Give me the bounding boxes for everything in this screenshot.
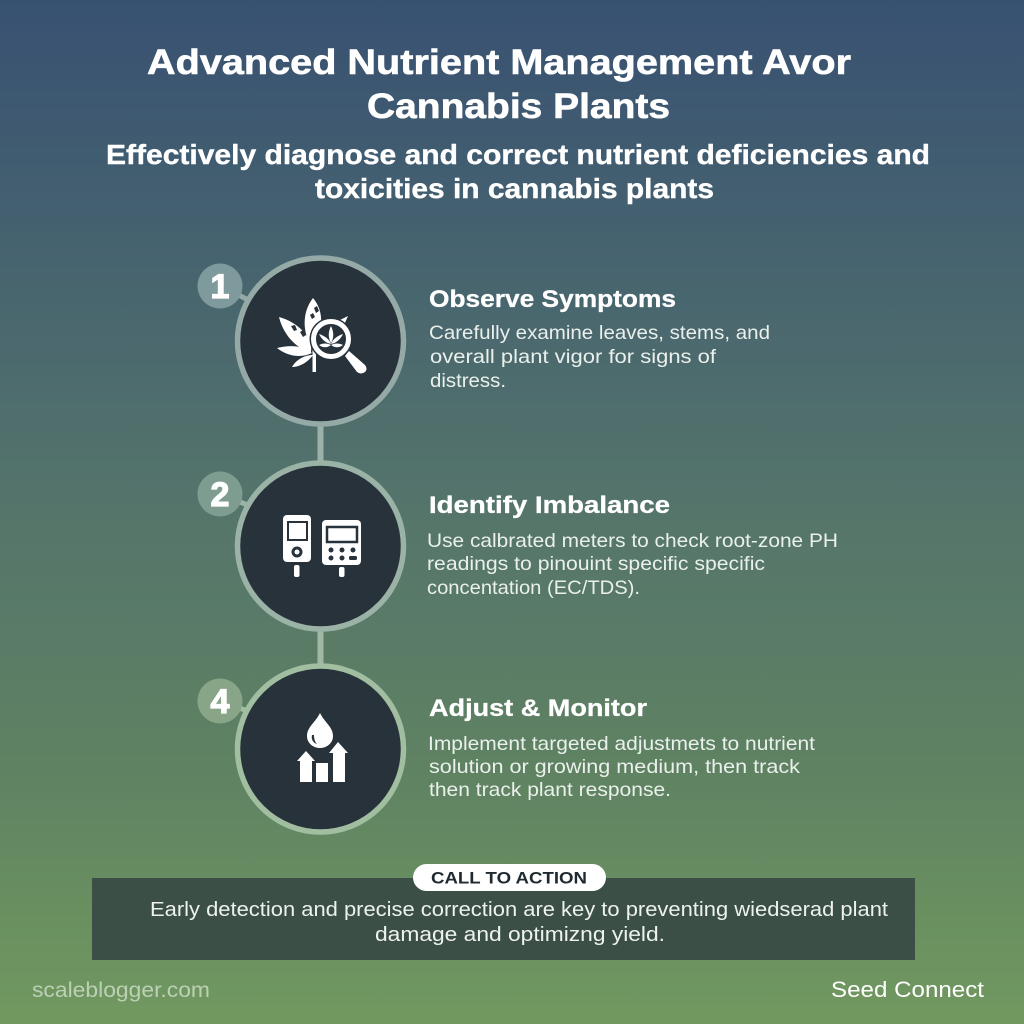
connector: step 1 to step 2 [318,425,324,462]
connector: step 2 to step 3 [318,630,324,665]
step 1 text: Observe Symptoms [429,286,676,313]
step 3 text: solution or growing medium, then track [429,756,800,778]
call to action text [150,898,888,946]
icon: water drop and rising arrows [297,713,348,782]
step 1 node [198,258,404,424]
title: Cannabis Plants [367,87,670,126]
step 3 node [198,666,404,832]
icon: cannabis leaf under magnifier [277,298,366,374]
title [147,43,851,126]
badge 2 [198,472,242,516]
call to action pill [413,864,606,891]
step 3 text: Adjust & Monitor [429,695,647,722]
badge 4 [198,678,242,724]
step 2 text: readings to pinouint specific specific [427,553,765,575]
step 2 text: Use calbrated meters to check root-zone PH [427,530,838,552]
badge 1: 1 [211,268,229,306]
step 2 text: Identify Imbalance [429,492,670,519]
step 1 text: overall plant vigor for signs of [430,346,717,368]
step 1 text: distress. [430,370,506,392]
subtitle: toxicities in cannabis plants [315,173,714,204]
call to action text: damage and optimizng yield. [375,923,665,946]
step 1 text: Carefully examine leaves, stems, and [429,322,770,344]
call to action text: Early detection and precise correction are key to preventing wiedserad plant [150,898,888,921]
subtitle: Effectively diagnose and correct nutrient deficiencies and [106,139,930,170]
badge 1 [198,264,242,308]
badge 4: 4 [211,683,230,721]
call to action pill: CALL TO ACTION [431,868,587,888]
step 3 text: then track plant response. [429,779,671,801]
subtitle [106,139,930,204]
footer: brand: Seed Connect [831,977,985,1002]
step 2 text [427,492,838,599]
step 1 text [429,286,770,392]
step 2 node [198,463,404,629]
step 3 text [428,695,816,801]
call to action panel [92,864,915,960]
badge 2: 2 [211,476,229,514]
step 2 text: concentation (EC/TDS). [427,577,640,599]
icon: handheld meters [283,515,361,577]
step 3 text: Implement targeted adjustmets to nutrient [428,733,816,755]
footer: website: scaleblogger.com [32,978,210,1002]
title: Advanced Nutrient Management Avor [147,43,851,82]
